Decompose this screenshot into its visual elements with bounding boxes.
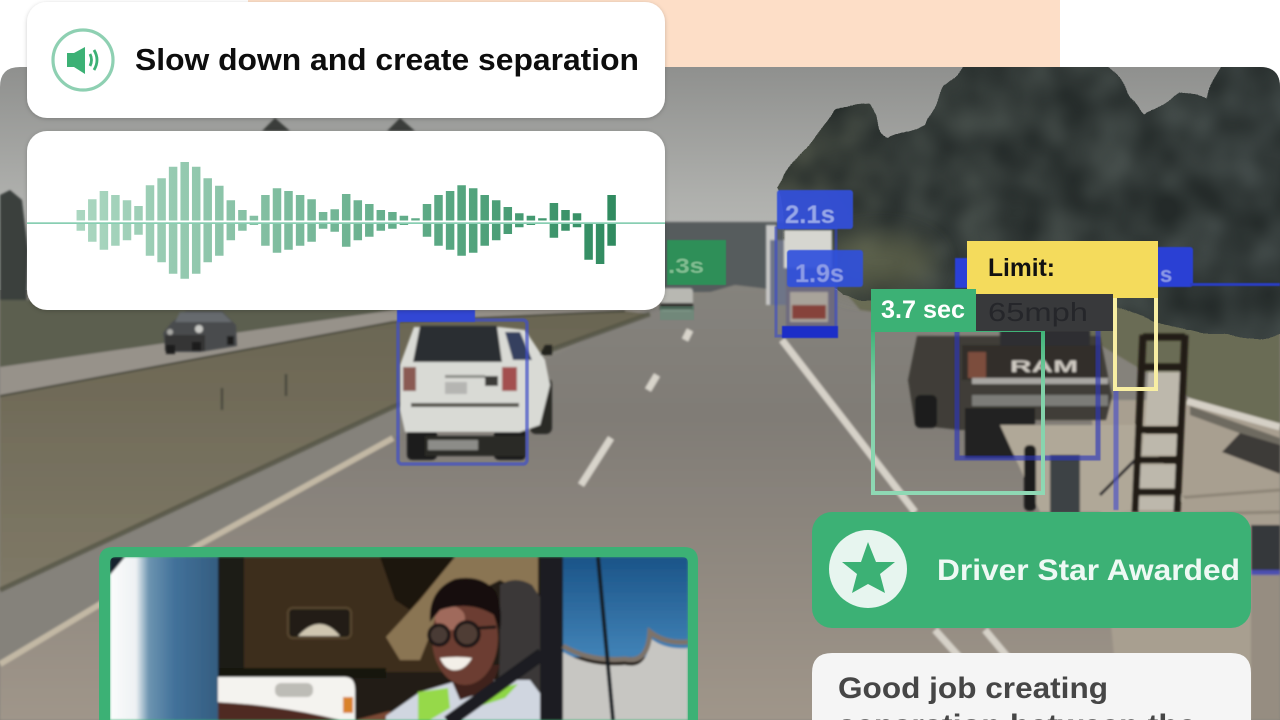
white SUV — [400, 326, 552, 460]
peach background band — [248, 0, 1060, 67]
blue box: pickup: s — [1160, 262, 1172, 287]
green detection label: .3s — [668, 255, 704, 278]
lane dashes — [581, 330, 690, 485]
ladder — [1135, 335, 1185, 512]
speed limit box — [967, 241, 1158, 389]
panel: driver star — [812, 512, 1251, 628]
olive lower foliage — [825, 234, 935, 290]
smile — [440, 657, 472, 670]
detection boxes — [397, 190, 1280, 510]
waveform bars — [81, 162, 612, 279]
cab interior — [350, 557, 646, 720]
truck trailer — [766, 225, 836, 328]
speed limit box: Limit: — [988, 254, 1055, 282]
distant car — [660, 288, 693, 311]
oncoming grey car — [163, 311, 237, 354]
blue box: truck — [776, 190, 863, 338]
panel: driver photo — [99, 547, 698, 720]
seat — [498, 580, 542, 700]
concrete barrier — [0, 311, 650, 590]
green detection label — [660, 240, 726, 320]
blue box: truck: 2.1s — [785, 201, 835, 229]
blue box: pickup — [955, 247, 1280, 510]
door pillar — [540, 557, 565, 720]
speed limit dark tab: 65mph — [988, 297, 1088, 327]
rear mirror — [288, 608, 351, 638]
glasses — [429, 625, 449, 645]
door mirror — [110, 557, 218, 720]
ground base — [0, 290, 1280, 720]
shirt — [386, 680, 545, 720]
speed limit dark tab — [976, 294, 1113, 331]
ram pickup: RAM — [1010, 357, 1078, 376]
panel: feedback message — [812, 653, 1251, 720]
arm — [216, 702, 340, 720]
panel: voice alert — [27, 2, 665, 118]
left grass — [0, 300, 420, 368]
blue box: truck: 1.9s — [795, 260, 844, 288]
left shoulder line — [0, 438, 393, 664]
alert text: Slow down and create separation — [135, 42, 639, 77]
headway label — [871, 289, 976, 332]
blue box: SUV — [397, 310, 527, 464]
far carriageway — [0, 296, 660, 396]
far tree line — [640, 222, 790, 292]
door panel — [563, 557, 688, 657]
tree mass — [775, 60, 1280, 335]
headway label: 3.7 sec — [881, 296, 965, 324]
driver in cab photo — [110, 557, 688, 720]
icon: speaker — [53, 30, 113, 90]
waveform baseline — [27, 222, 665, 224]
seat belt — [448, 654, 542, 720]
cab window — [216, 677, 355, 720]
face — [432, 591, 498, 685]
right grass — [845, 292, 1280, 430]
sun visor — [386, 557, 538, 660]
right edge line — [782, 340, 1010, 660]
hair — [430, 578, 501, 630]
left tree line — [0, 189, 28, 302]
sky — [0, 67, 1280, 307]
neck — [445, 665, 500, 700]
panel: audio waveform — [27, 131, 665, 310]
side mirror arm — [234, 557, 244, 669]
feedback text — [838, 672, 1196, 720]
feedback text: Good job creating — [838, 672, 1108, 705]
main road — [0, 284, 1114, 720]
headway box outline — [873, 330, 1043, 493]
ram pickup — [908, 330, 1185, 513]
icon: star badge — [829, 530, 907, 608]
star heading: Driver Star Awarded — [937, 554, 1240, 587]
right shoulder — [1091, 399, 1280, 666]
